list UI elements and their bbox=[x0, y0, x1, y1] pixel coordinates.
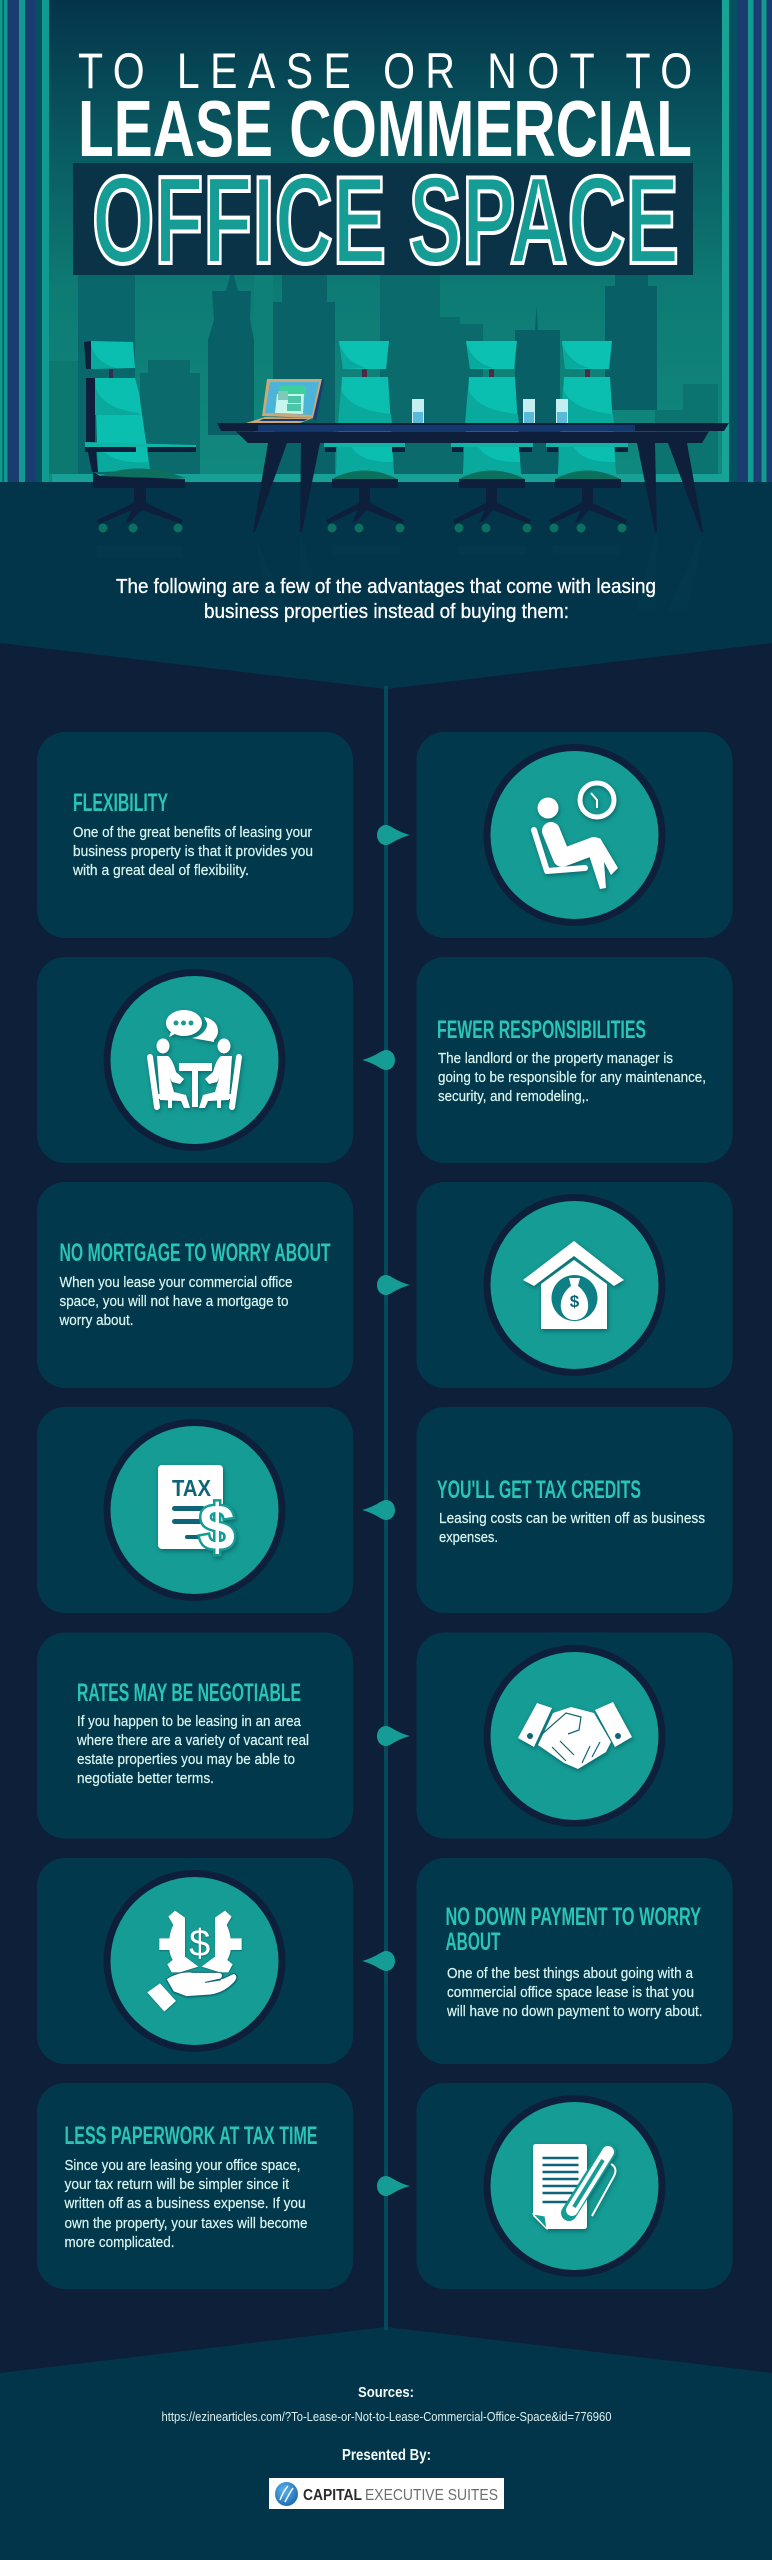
panel: flexibility text: with a great deal of flexibility. bbox=[72, 862, 249, 879]
panel: hand with money icon bbox=[37, 1858, 353, 2064]
marker arrow bbox=[377, 2176, 410, 2196]
row 4: tax credits bbox=[37, 1407, 732, 1613]
laptop bbox=[246, 379, 324, 423]
panel: tax credits text bbox=[416, 1407, 732, 1613]
panel: less paperwork text: written off as a business expense. If you bbox=[64, 2195, 306, 2212]
panel: handshake icon bbox=[416, 1632, 732, 1838]
floor reflections bbox=[97, 536, 703, 610]
panel: paper and pen icon bbox=[416, 2083, 732, 2289]
panel: fewer responsibilities text: FEWER RESPONSIBILITIES bbox=[437, 1016, 646, 1044]
panel: less paperwork text bbox=[37, 2083, 353, 2289]
panel: tax credits text: YOU'LL GET TAX CREDITS bbox=[437, 1476, 641, 1504]
curtain left bbox=[0, 0, 42, 483]
panel: waiting chair icon bbox=[416, 732, 732, 938]
sources: https://ezinearticles.com/?To-Lease-or-Not-to-Lease-Commercial-Office-Space&id=776960 bbox=[162, 2410, 612, 2424]
panel: no down payment text bbox=[416, 1858, 732, 2064]
row 5: rates negotiable bbox=[37, 1632, 732, 1838]
panel: no mortgage text: NO MORTGAGE TO WORRY ABOUT bbox=[60, 1239, 330, 1267]
panel: rates text: estate properties you may be able to bbox=[77, 1751, 295, 1768]
chair: back view 1 bbox=[324, 341, 405, 532]
row 2: fewer responsibilities bbox=[37, 957, 732, 1163]
panel: less paperwork text: more complicated. bbox=[64, 2234, 174, 2251]
panel: no mortgage text bbox=[37, 1182, 353, 1388]
panel: rates text: negotiate better terms. bbox=[77, 1770, 214, 1787]
panel: tax credits text: Leasing costs can be written off as business bbox=[439, 1510, 705, 1527]
panel: no mortgage text: space, you will not have a mortgage to bbox=[60, 1293, 288, 1310]
panel: no mortgage text: worry about. bbox=[59, 1312, 134, 1329]
panel: less paperwork text: your tax return will be simpler since it bbox=[64, 2176, 290, 2193]
panel: flexibility text: FLEXIBILITY bbox=[73, 789, 168, 817]
header illustration: conference room bbox=[0, 0, 772, 647]
panel: rates text bbox=[37, 1632, 353, 1838]
row 6: no down payment bbox=[37, 1858, 732, 2064]
panel: rates text: where there are a variety of vacant real bbox=[76, 1732, 309, 1749]
panel: flexibility text: One of the great benefits of leasing your bbox=[73, 824, 312, 841]
panel: house icon bbox=[416, 1182, 732, 1388]
panel: fewer responsibilities text: security, and remodeling,. bbox=[438, 1088, 589, 1105]
panel: no down payment text: will have no down payment to worry about. bbox=[446, 2003, 702, 2020]
panel: tax credits text: expenses. bbox=[439, 1529, 498, 1546]
logo: capital executive suites: EXECUTIVE SUITES bbox=[365, 2487, 498, 2504]
panel: hand with money icon: $ bbox=[189, 1923, 210, 1965]
title bbox=[73, 43, 693, 290]
logo: capital executive suites: CAPITAL bbox=[303, 2487, 362, 2504]
marker arrow bbox=[362, 1050, 395, 1070]
marker arrow bbox=[377, 1275, 410, 1295]
panel: tax icon: TAX bbox=[172, 1475, 212, 1501]
panel: flexibility text: business property is that it provides you bbox=[73, 843, 313, 860]
sources bbox=[162, 2384, 612, 2424]
timeline line bbox=[384, 686, 388, 2330]
panel: tax icon bbox=[37, 1407, 353, 1613]
marker arrow bbox=[377, 825, 410, 845]
row 7: less paperwork bbox=[37, 2083, 732, 2289]
skyline bbox=[45, 265, 718, 474]
panel: no mortgage text: When you lease your commercial office bbox=[60, 1274, 292, 1291]
panel: house icon: $ bbox=[570, 1292, 580, 1311]
marker arrow bbox=[377, 1726, 410, 1746]
panel: fewer responsibilities text: The landlord or the property manager is bbox=[438, 1050, 673, 1067]
row 3: no mortgage bbox=[37, 1182, 732, 1388]
sources: Sources: bbox=[358, 2384, 414, 2401]
logo: capital executive suites bbox=[269, 2478, 504, 2509]
panel: rates text: If you happen to be leasing in an area bbox=[77, 1713, 302, 1730]
panel: no down payment text: ABOUT bbox=[446, 1928, 500, 1956]
panel: no down payment text: One of the best things about going with a bbox=[447, 1965, 694, 1982]
marker arrow bbox=[362, 1500, 395, 1520]
conference table bbox=[217, 423, 729, 532]
dark navy timeline section bbox=[0, 643, 772, 2373]
marker arrow bbox=[362, 1951, 395, 1971]
chair: left side view bbox=[84, 341, 196, 532]
panel: less paperwork text: LESS PAPERWORK AT TAX TIME bbox=[64, 2122, 318, 2150]
panel: tax icon: $ bbox=[199, 1491, 235, 1563]
chair: back view 3 bbox=[546, 341, 628, 532]
panel: no down payment text: commercial office space lease is that you bbox=[447, 1984, 694, 2001]
chair: back view 2 bbox=[451, 341, 533, 532]
panel: fewer responsibilities text: going to be responsible for any maintenance, bbox=[438, 1069, 706, 1086]
panel: less paperwork text: Since you are leasing your office space, bbox=[64, 2157, 300, 2174]
panel: meeting icon bbox=[37, 957, 353, 1163]
panel: rates text: RATES MAY BE NEGOTIABLE bbox=[77, 1679, 301, 1707]
panel: flexibility text bbox=[37, 732, 353, 938]
panel: fewer responsibilities text bbox=[416, 957, 732, 1163]
curtain right bbox=[729, 0, 772, 483]
floor bbox=[0, 482, 772, 647]
presented by: Presented By: bbox=[342, 2447, 431, 2464]
row 1: flexibility bbox=[37, 732, 732, 938]
panel: less paperwork text: own the property, your taxes will become bbox=[64, 2215, 308, 2232]
intro text: The following are a few of the advantages that come with leasing bbox=[116, 576, 656, 598]
intro text bbox=[116, 576, 656, 623]
intro text: business properties instead of buying them: bbox=[204, 601, 569, 623]
glasses of water bbox=[412, 399, 568, 423]
title: TO LEASE OR NOT TO bbox=[78, 43, 692, 99]
